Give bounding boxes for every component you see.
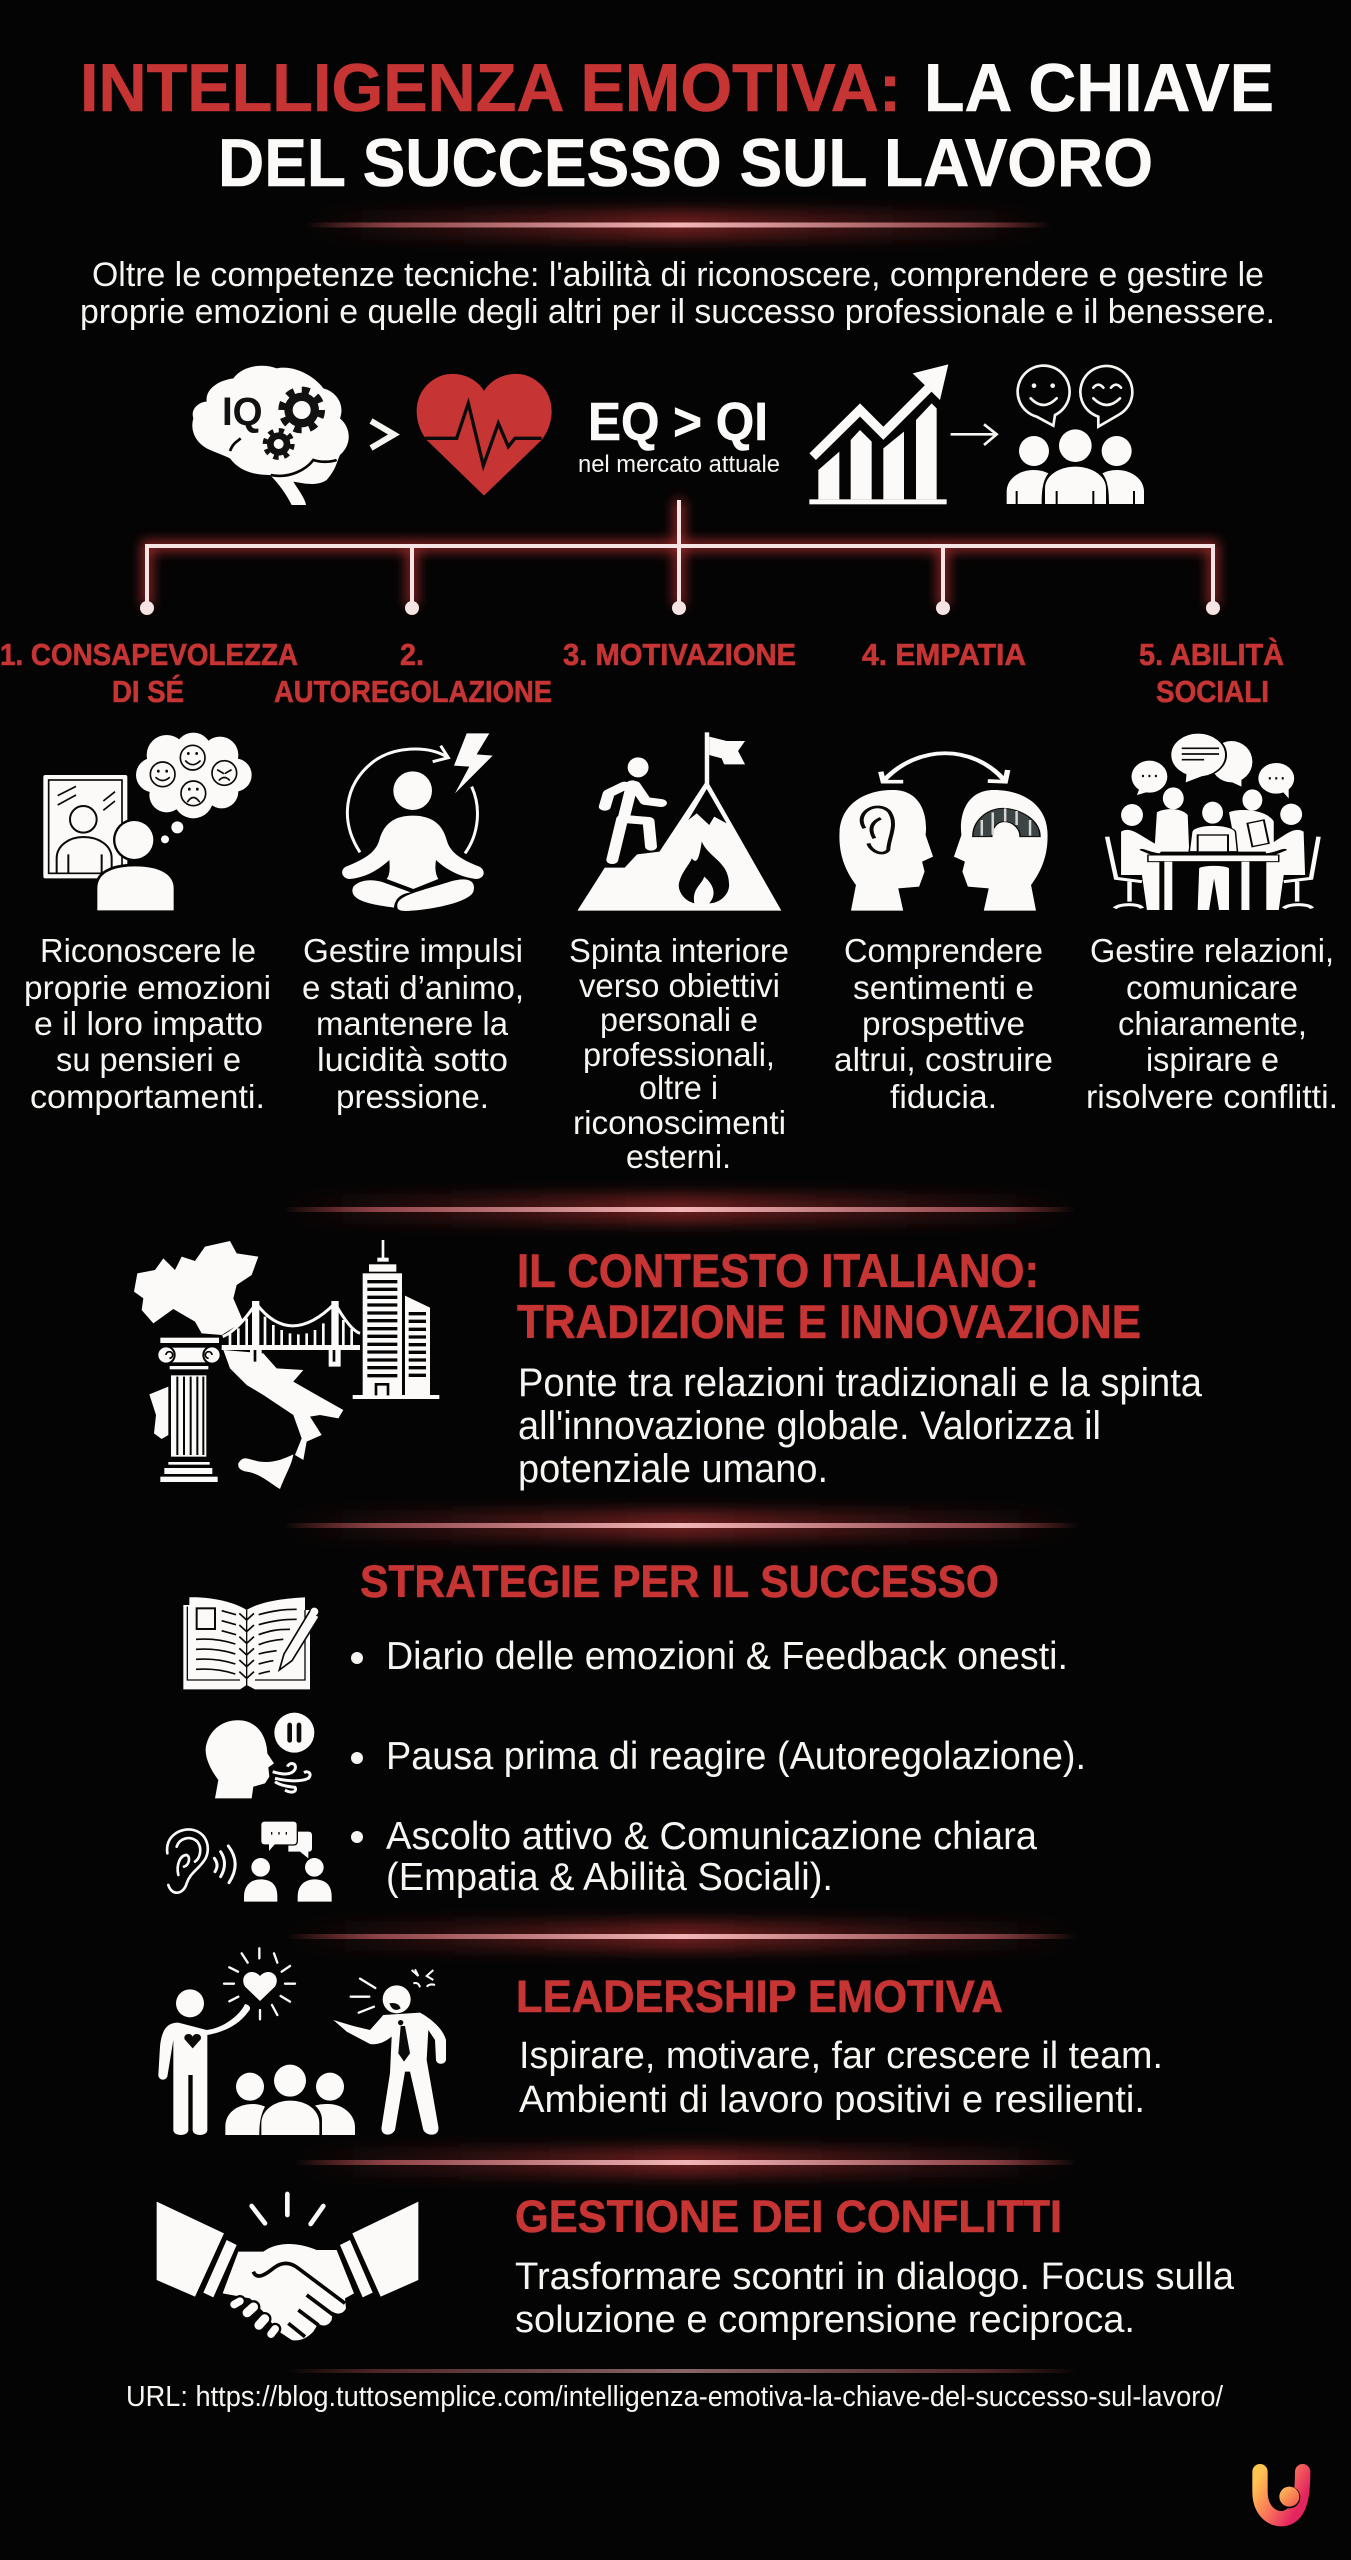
title: DEL SUCCESSO SUL LAVORO [218,125,1153,201]
pillar headings: 4. EMPATIA [862,637,1026,672]
text: empatia: sentimenti e [853,969,1034,1006]
section: leadership emotiva: LEADERSHIP EMOTIVA [516,1971,1003,2022]
pillar headings: 5. ABILITÀ [1139,637,1284,672]
icon: italy with column, bridge and skyscraper [134,1240,439,1489]
icon: self regulation meditation [342,733,493,911]
pillar headings [0,637,1284,709]
text: autoregolazione: e stati d’animo, [302,969,524,1006]
text: autoregolazione: Gestire impulsi [303,932,523,969]
text: autoregolazione: pressione. [336,1078,489,1115]
text: abilita sociali: risolvere conflitti. [1086,1078,1338,1115]
subtitle: Oltre le competenze tecniche: l'abilità di riconoscere, comprendere e gestire le [92,256,1264,294]
icon: good and bad leader with team [158,1948,446,2135]
strategy item: ascolto [351,1815,1037,1899]
section: leadership emotiva: Ambienti di lavoro positivi e resilienti. [519,2079,1145,2121]
heading: strategie: STRATEGIE PER IL SUCCESSO [360,1556,999,1607]
icon: brain with IQ and gears [192,366,349,505]
section: contesto italiano: IL CONTESTO ITALIANO: [517,1244,1039,1297]
subtitle [80,256,1275,331]
text: empatia: fiducia. [890,1078,997,1115]
pillar headings: 3. MOTIVAZIONE [563,637,796,672]
section: gestione dei conflitti [515,2191,1235,2341]
icon: arrow to team [951,424,997,445]
text: motivazione [569,932,789,1175]
text: motivazione: verso obiettivi [579,967,780,1004]
tree connector [140,500,1220,615]
section: contesto italiano: TRADIZIONE E INNOVAZIONE [517,1295,1141,1348]
icon: greater-than sign [371,421,394,448]
text: abilita sociali: chiaramente, [1118,1005,1307,1042]
text: motivazione: personali e [600,1001,758,1038]
section: gestione dei conflitti: GESTIONE DEI CONFLITTI [515,2191,1062,2242]
text: motivazione: professionali, [583,1036,775,1073]
section: gestione dei conflitti: soluzione e comprensione reciproca. [515,2299,1135,2341]
strategy item: diario: Diario delle emozioni & Feedback onesti. [386,1635,1068,1678]
text: autoregolazione: mantenere la [316,1005,509,1042]
source url: URL: https://blog.tuttosemplice.com/intelligenza-emotiva-la-chiave-del-successo-sul-lavoro/ [126,2381,1224,2413]
text: abilita sociali: comunicare [1126,969,1298,1006]
text: consapevolezza: su pensieri e [56,1041,241,1078]
text: empatia: prospettive [862,1005,1025,1042]
icon: social skills meeting [1107,733,1319,910]
section: contesto italiano [517,1244,1203,1491]
icon: ear and dialogue [167,1821,332,1902]
icon: motivation mountain with flag and climber [577,732,781,911]
EQ > QI statement: EQ > QI [588,392,768,452]
icon: self awareness mirror and thought cloud [43,733,252,912]
pillar headings: 1. CONSAPEVOLEZZA [0,637,298,672]
strategy item: ascolto: Ascolto attivo & Comunicazione chiara [386,1815,1037,1858]
icon: heart with pulse [417,374,552,496]
icon: happy team with speech bubbles [1007,366,1144,504]
icon: handshake [157,2194,418,2341]
text: consapevolezza: e il loro impatto [34,1005,263,1042]
text: consapevolezza: comportamenti. [30,1078,265,1115]
text: motivazione: riconoscimenti [573,1104,786,1141]
text: consapevolezza: Riconoscere le [40,932,256,969]
text: motivazione: oltre i [639,1069,718,1106]
section: gestione dei conflitti: Trasformare scontri in dialogo. Focus sulla [515,2256,1235,2298]
text: motivazione: esterni. [626,1138,731,1175]
strategy item: ascolto: (Empatia & Abilità Sociali). [386,1856,833,1899]
pillar headings: 2. [400,637,424,672]
text: consapevolezza [24,932,271,1115]
text: motivazione: Spinta interiore [569,932,789,969]
text: empatia: altrui, costruire [834,1041,1053,1078]
text: autoregolazione [302,932,524,1115]
section: contesto italiano: potenziale umano. [518,1447,828,1491]
icon: brain with IQ and gears: IQ [222,390,263,434]
text: abilita sociali [1086,932,1338,1115]
text: autoregolazione: lucidità sotto [317,1041,508,1078]
pillar headings: SOCIALI [1156,674,1269,709]
text: abilita sociali: ispirare e [1146,1041,1279,1078]
pillar headings: AUTOREGOLAZIONE [274,674,552,709]
section: contesto italiano: Ponte tra relazioni tradizionali e la spinta [518,1361,1203,1405]
icon: empathy two heads [839,753,1048,911]
title: LA CHIAVE [924,50,1274,126]
section: leadership emotiva [516,1971,1163,2121]
icon: journal and pen [183,1597,319,1689]
icon: growth chart [809,364,948,504]
title [80,50,1274,201]
section: contesto italiano: all'innovazione globale. Valorizza il [518,1404,1101,1448]
text: empatia [834,932,1053,1115]
text: empatia: Comprendere [844,932,1043,969]
text: abilita sociali: Gestire relazioni, [1090,932,1334,969]
title: INTELLIGENZA EMOTIVA: [80,50,901,126]
strategy item: pausa: Pausa prima di reagire (Autoregolazione). [386,1735,1086,1778]
pillar descriptions [24,932,1338,1175]
subtitle: proprie emozioni e quelle degli altri per il successo professionale e il benessere. [80,293,1275,331]
section: leadership emotiva: Ispirare, motivare, far crescere il team. [519,2035,1163,2077]
pillar headings: DI SÉ [112,674,184,709]
EQ > QI statement [578,392,780,478]
EQ > QI statement: nel mercato attuale [578,451,780,478]
logo [1260,2472,1303,2519]
icon: head with pause and breath [206,1713,314,1798]
text: consapevolezza: proprie emozioni [24,969,271,1006]
